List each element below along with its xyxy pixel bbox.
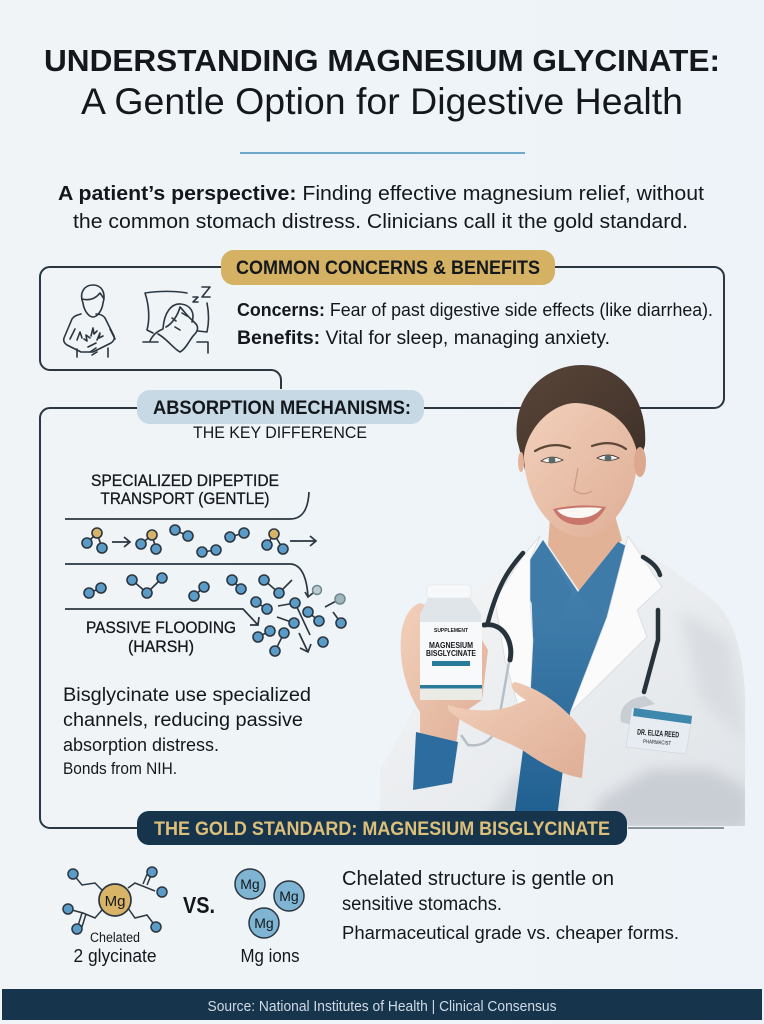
product bottle: SUPPLEMENT <box>434 628 469 634</box>
shirt <box>513 540 628 826</box>
title: UNDERSTANDING MAGNESIUM GLYCINATE: <box>44 43 720 78</box>
diagram: transport pathways <box>65 472 346 656</box>
heading: absorption mechanisms: ABSORPTION MECHANISMS: <box>153 397 411 419</box>
heading: common concerns and benefits <box>221 250 555 285</box>
diagram: magnesium ions: Mg <box>279 888 299 904</box>
heading: absorption mechanisms: THE KEY DIFFERENCE <box>193 423 367 442</box>
concerns and benefits text <box>237 300 713 349</box>
gold standard description <box>342 867 679 943</box>
heading: common concerns and benefits: COMMON CONCERNS & BENEFITS <box>236 257 540 279</box>
coat fold shadows <box>490 618 745 826</box>
diagram: magnesium ions: Mg <box>254 915 274 931</box>
bonds <box>87 530 341 651</box>
molecule atoms <box>82 525 346 656</box>
pointing hand <box>448 682 586 778</box>
neck <box>548 505 622 592</box>
hair back <box>516 365 645 470</box>
diagram: magnesium ions: Mg <box>240 876 260 892</box>
product bottle: BISGLYCINATE <box>426 649 477 658</box>
product bottle <box>420 585 482 700</box>
explanation text: Bisglycinate use specialized <box>63 685 311 706</box>
diagram: chelated magnesium <box>63 867 167 966</box>
product bottle: MAGNESIUM <box>429 641 473 650</box>
name badge: PHARMACIST <box>643 739 672 747</box>
title <box>44 43 720 122</box>
concerns and benefits text: Concerns: Fear of past digestive side effects (like diarrhea). <box>237 300 713 320</box>
holding hand <box>401 603 488 745</box>
intro text: the common stomach distress. Clinicians call it the gold standard. <box>73 211 688 233</box>
explanation text: absorption distress. <box>63 734 219 755</box>
coat lapels <box>495 536 540 740</box>
vs label: VS. <box>183 892 215 918</box>
explanation text: Bonds from NIH. <box>63 759 177 778</box>
stethoscope chest piece <box>620 696 655 725</box>
ears <box>634 447 646 477</box>
gold standard description: Pharmaceutical grade vs. cheaper forms. <box>342 922 679 943</box>
face <box>524 403 637 537</box>
channel labels: (HARSH) <box>128 638 194 656</box>
explanation text: channels, reducing passive <box>63 710 303 731</box>
channel labels <box>86 472 279 656</box>
heading: the gold standard <box>137 811 724 845</box>
diagram: chelated magnesium: Mg <box>105 893 125 910</box>
diagram: chelated magnesium: 2 glycinate <box>74 946 156 966</box>
icon: person with stomach pain <box>64 285 115 357</box>
explanation text <box>63 685 311 778</box>
gold standard description: sensitive stomachs. <box>342 894 502 915</box>
name badge <box>626 708 692 754</box>
icon: sleeping person <box>143 287 210 353</box>
channel labels: SPECIALIZED DIPEPTIDE <box>91 472 279 490</box>
brows <box>535 443 626 451</box>
intro text <box>58 183 704 233</box>
diagram: magnesium ions <box>235 869 304 966</box>
channel lines <box>65 492 316 652</box>
left shirt cuff <box>413 732 458 790</box>
diagram: magnesium ions: Mg ions <box>240 946 300 966</box>
heading: the gold standard: THE GOLD STANDARD: MAGNESIUM BISGLYCINATE <box>154 819 610 840</box>
mouth <box>553 505 606 525</box>
panel outlines <box>40 267 724 828</box>
heading: absorption mechanisms <box>137 390 424 442</box>
footer <box>2 989 762 1020</box>
gold standard description: Chelated structure is gentle on <box>342 867 614 890</box>
nose <box>574 468 592 494</box>
diagram: chelated magnesium: Chelated <box>90 930 140 945</box>
photo: pharmacist holding bottle <box>380 365 750 830</box>
name badge: DR. ELIZA REED <box>637 728 680 739</box>
eyes <box>541 455 619 463</box>
channel labels: TRANSPORT (GENTLE) <box>100 490 270 508</box>
footer: Source: National Institutes of Health | Clinical Consensus <box>208 999 556 1015</box>
concerns and benefits text: Benefits: Vital for sleep, managing anxiety. <box>237 328 610 349</box>
stethoscope <box>484 553 660 692</box>
channel labels: PASSIVE FLOODING <box>86 619 236 637</box>
intro text: A patient’s perspective: Finding effective magnesium relief, without <box>58 183 704 205</box>
lab coat <box>380 538 745 826</box>
title: A Gentle Option for Digestive Health <box>81 81 683 122</box>
